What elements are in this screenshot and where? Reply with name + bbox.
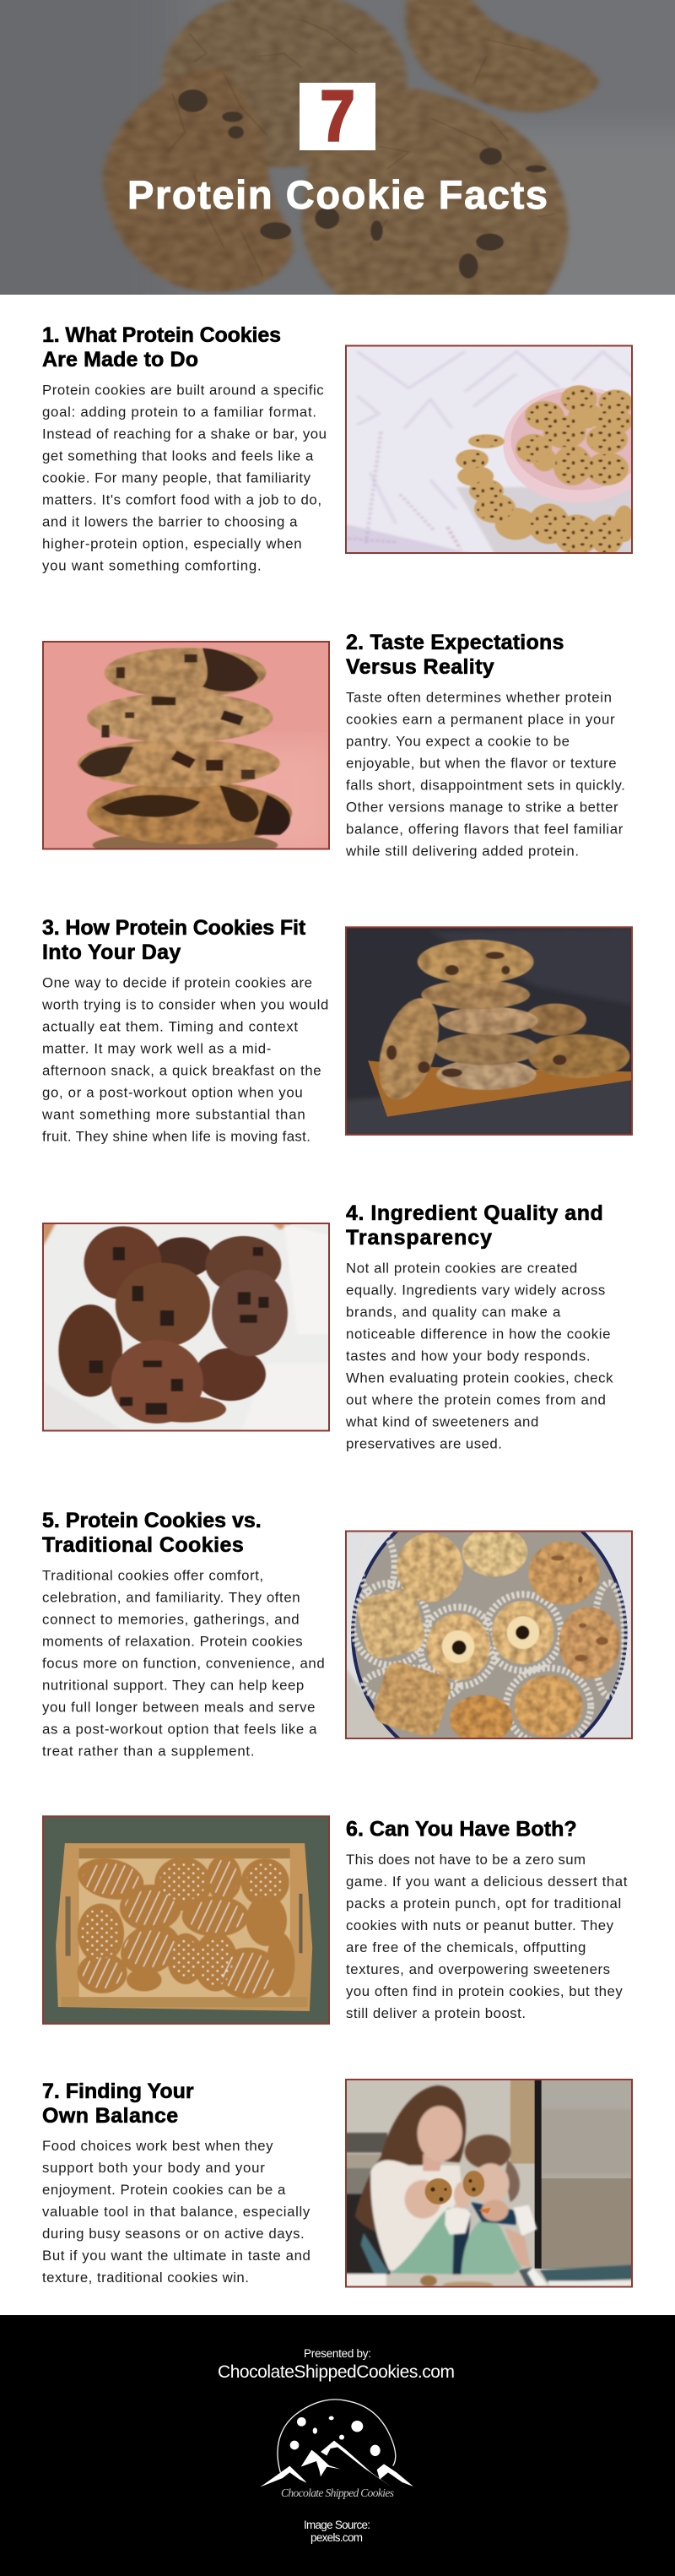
photo: cookies on pink plate (344, 344, 655, 555)
photo: dark chocolate cookies on white paper (42, 1223, 330, 1432)
website name: ChocolateShippedCookies.com (218, 2362, 455, 2382)
heading 4: Transparency (346, 1226, 492, 1250)
logo: cookie and mountains (260, 2400, 413, 2499)
body text 5: treat rather than a supplement. (42, 1743, 255, 1760)
body text 4: what kind of sweeteners and (345, 1413, 538, 1430)
heading 3: Into Your Day (42, 941, 181, 964)
body text 7: But if you want the ultimate in taste and (42, 2248, 310, 2264)
photo: gingerbread cookies in wooden tray (42, 1815, 330, 2025)
heading 7 (42, 2080, 194, 2128)
body text 2 (345, 689, 625, 860)
body text 3: actually eat them. Timing and context (42, 1018, 298, 1035)
body text 3: afternoon snack, a quick breakfast on the (42, 1062, 321, 1079)
body text 3: matter. It may work well as a mid- (42, 1040, 271, 1057)
body text 7: texture, traditional cookies win. (42, 2270, 249, 2286)
body text 2: cookies earn a permanent place in your (346, 711, 615, 728)
body text 5: nutritional support. They can help keep (42, 1677, 304, 1694)
photo: butter cookie tin (345, 1493, 633, 1776)
body text 1: matters. It's comfort food with a job to do, (42, 491, 321, 508)
number badge: 7 (320, 76, 355, 155)
body text 7: support both your body and your (42, 2160, 265, 2176)
body text 4: preservatives are used. (346, 1435, 502, 1452)
body text 3: fruit. They shine when life is moving fast. (42, 1128, 310, 1145)
footer (0, 2315, 675, 2576)
heading 2: Versus Reality (346, 655, 494, 679)
body text 1: cookie. For many people, that familiarity (42, 469, 311, 486)
body text 5: as a post-workout option that feels like a (42, 1721, 317, 1738)
body text 2: pantry. You expect a cookie to be (346, 733, 570, 750)
body text 6: packs a protein punch, opt for traditional (346, 1895, 621, 1912)
body text 6: textures, and overpowering sweeteners (346, 1961, 610, 1977)
hero photo: cookies on grey surface (0, 0, 675, 295)
body text 3: want something more substantial than (41, 1106, 305, 1123)
presented by label: Presented by: (304, 2347, 371, 2360)
body text 3 (41, 974, 328, 1145)
heading 2 (346, 631, 564, 679)
panel: fact 4 (42, 1201, 613, 1452)
heading 1: Are Made to Do (42, 348, 198, 371)
body text 4: noticeable difference in how the cookie (346, 1326, 611, 1342)
image source credit: pexels.com (310, 2531, 363, 2544)
body text 5: you full longer between meals and serve (42, 1699, 316, 1716)
body text 6: game. If you want a delicious dessert that (346, 1874, 628, 1890)
body text 6: This does not have to be a zero sum (346, 1852, 586, 1868)
image source credit: Image Source: (304, 2519, 370, 2531)
heading 5: 5. Protein Cookies vs. (42, 1509, 262, 1532)
logo: cookie and mountains: Chocolate Shipped Cookies (281, 2487, 394, 2499)
body text 7: during busy seasons or on active days. (42, 2226, 305, 2242)
body text 1: and it lowers the barrier to choosing a (42, 513, 298, 530)
panel: fact 2 (42, 631, 625, 860)
panel: fact 1 (42, 323, 655, 574)
heading 4 (346, 1201, 603, 1250)
heading 2: 2. Taste Expectations (346, 631, 564, 654)
body text 7 (42, 2138, 310, 2286)
heading 1 (42, 323, 281, 371)
body text 1 (42, 382, 327, 574)
heading 3 (42, 916, 306, 964)
body text 5: connect to memories, gatherings, and (42, 1611, 300, 1628)
panel: fact 6 (42, 1815, 628, 2025)
body text 7: enjoyment. Protein cookies can be a (42, 2182, 286, 2198)
body text 4: out where the protein comes from and (346, 1391, 606, 1408)
panel: fact 5 (42, 1493, 633, 1776)
body text 5: celebration, and familiarity. They often (42, 1589, 300, 1606)
body text 3: One way to decide if protein cookies are (42, 974, 312, 991)
body text 1: Instead of reaching for a shake or bar, you (42, 426, 327, 442)
body text 5: moments of relaxation. Protein cookies (42, 1633, 303, 1650)
body text 2: Other versions manage to strike a better (346, 799, 618, 816)
body text 6: still deliver a protein boost. (346, 2005, 526, 2021)
number badge (300, 76, 375, 155)
body text 7: valuable tool in that balance, especially (42, 2204, 310, 2220)
heading 7: Own Balance (42, 2104, 178, 2128)
body text 7: Food choices work best when they (42, 2138, 273, 2154)
panel: fact 3 (41, 916, 633, 1145)
body text 6: cookies with nuts or peanut butter. They (346, 1917, 614, 1933)
body text 1: goal: adding protein to a familiar format. (42, 404, 316, 420)
photo: stacked cookies on pink background (42, 641, 336, 858)
body text 4: equally. Ingredients vary widely across (346, 1282, 605, 1299)
body text 5: focus more on function, convenience, and (42, 1655, 325, 1672)
hero banner (0, 0, 675, 323)
body text 6: are free of the chemicals, offputting (346, 1939, 586, 1955)
body text 6: you often find in protein cookies, but they (346, 1983, 623, 1999)
heading 3: 3. How Protein Cookies Fit (42, 916, 306, 940)
panel: fact 7 (42, 2079, 633, 2288)
body text 1: Protein cookies are built around a specific (42, 382, 324, 399)
heading 7: 7. Finding Your (42, 2080, 194, 2103)
photo: mother and daughter holding cookies (345, 2079, 633, 2288)
body text 5: Traditional cookies offer comfort, (42, 1567, 263, 1584)
heading 1: 1. What Protein Cookies (42, 323, 281, 347)
image source credit (304, 2519, 370, 2544)
heading 5 (42, 1509, 262, 1557)
heading 4: 4. Ingredient Quality and (346, 1201, 603, 1225)
title: Protein Cookie Facts (127, 172, 548, 217)
heading 6: 6. Can You Have Both? (346, 1817, 577, 1841)
body text 2: enjoyable, but when the flavor or texture (346, 755, 617, 772)
body text 2: Taste often determines whether protein (346, 689, 612, 706)
body text 2: falls short, disappointment sets in quickly. (346, 777, 625, 794)
body text 4: Not all protein cookies are created (346, 1260, 577, 1277)
body text 1: you want something comforting. (42, 557, 262, 574)
body text 4: When evaluating protein cookies, check (346, 1369, 613, 1386)
body text 1: higher-protein option, especially when (42, 535, 302, 552)
body text 6 (346, 1852, 628, 2021)
body text 2: while still delivering added protein. (345, 843, 579, 860)
body text 3: go, or a post-workout option when you (42, 1084, 303, 1101)
body text 4: brands, and quality can make a (346, 1304, 561, 1321)
heading 5: Traditional Cookies (42, 1533, 244, 1557)
photo: cookie stack on wooden board (345, 926, 633, 1136)
body text 2: balance, offering flavors that feel familiar (346, 821, 624, 838)
body text 5 (42, 1567, 325, 1760)
body text 4: tastes and how your body responds. (346, 1348, 591, 1364)
body text 4 (345, 1260, 613, 1452)
body text 3: worth trying is to consider when you would (41, 996, 328, 1013)
body text 1: get something that looks and feels like a (42, 447, 314, 464)
